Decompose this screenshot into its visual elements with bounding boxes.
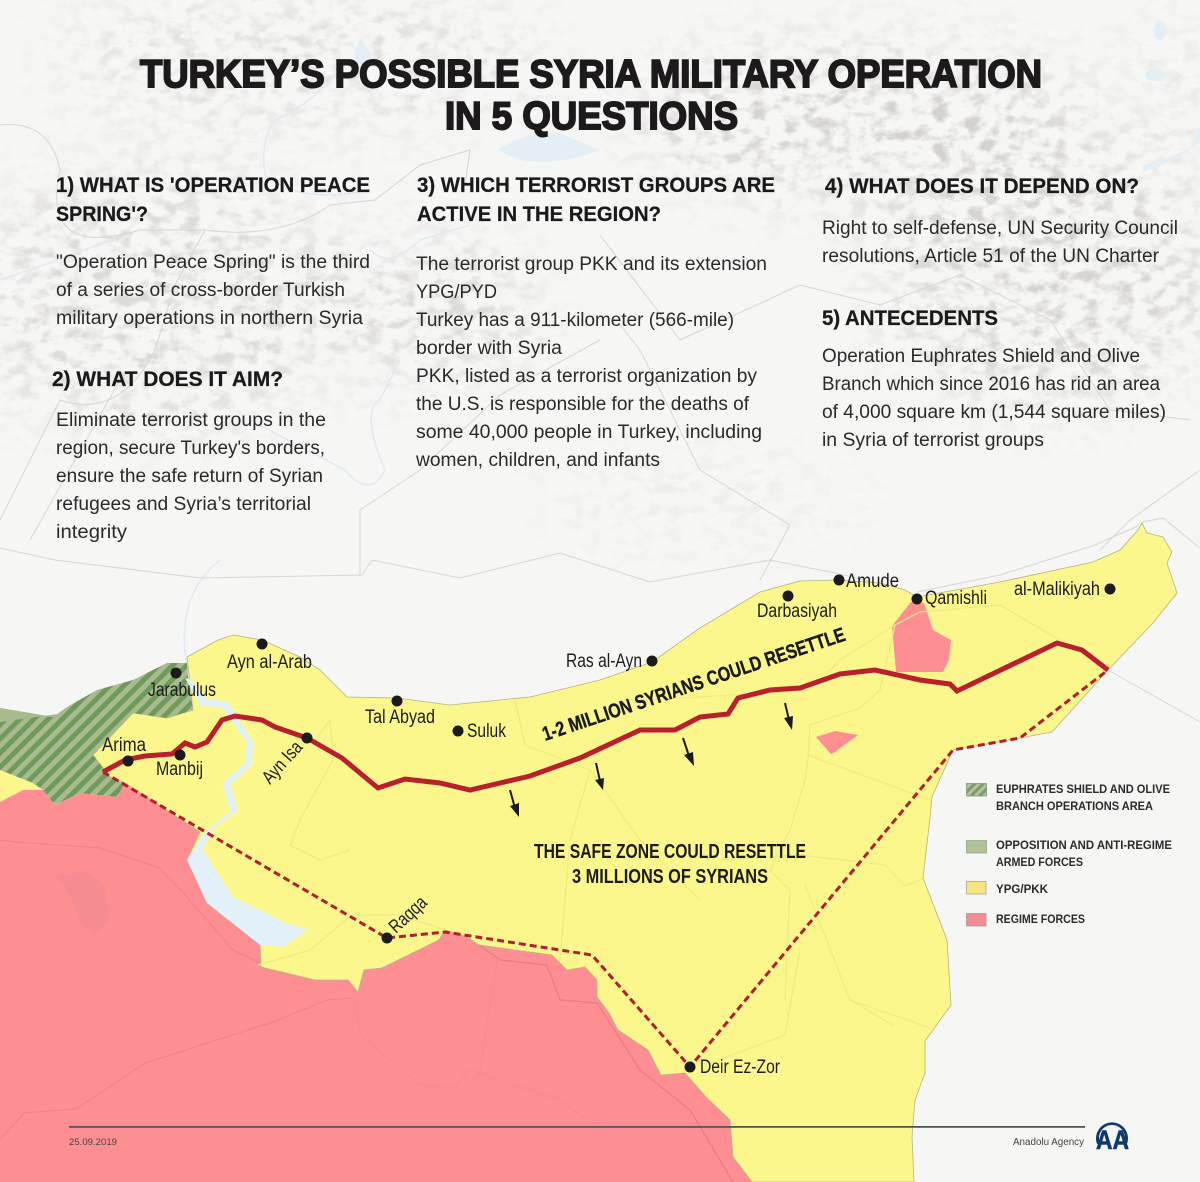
question 2 (52, 368, 326, 543)
footer rule (69, 1126, 1085, 1128)
question 4: Right to self-defense, UN Security Council (822, 218, 1178, 239)
area: regime pockets (892, 602, 951, 672)
safe zone dashed boundary (103, 670, 1108, 1067)
question 5: 5) ANTECEDENTS (822, 307, 998, 330)
question 3: 3) WHICH TERRORIST GROUPS ARE (417, 174, 775, 197)
city labels: Qamishli (925, 588, 987, 609)
question 1: SPRING'? (56, 203, 148, 226)
area: YPG/PKK main (93, 523, 1177, 1182)
question 4: resolutions, Article 51 of the UN Charter (822, 246, 1160, 267)
city labels: Darbasiyah (757, 601, 837, 622)
map: controlled areas (0, 523, 1177, 1182)
area: Euphrates Shield and Olive Branch (0, 663, 193, 805)
safe zone solid northern line (103, 643, 1108, 790)
question 5: Branch which since 2016 has rid an area (822, 374, 1160, 395)
question 2: refugees and Syria’s territorial (56, 494, 311, 515)
arrow 4 (784, 703, 793, 730)
city labels: Raqqa (385, 892, 432, 938)
background terrain map (0, 0, 1200, 722)
question 5: of 4,000 square km (1,544 square miles) (822, 402, 1166, 423)
question 5: in Syria of terrorist groups (822, 430, 1044, 451)
legend: regime forces: REGIME FORCES (996, 912, 1085, 926)
question 2: ensure the safe return of Syrian (56, 466, 323, 487)
legend (966, 782, 1172, 926)
icon: Anadolu Agency logo: AA (1096, 1125, 1129, 1155)
area: regime roads (0, 840, 733, 1182)
arrow 3 (683, 738, 694, 766)
question 1: of a series of cross-border Turkish (56, 280, 345, 301)
area: YPG/PKK western pocket (0, 770, 43, 802)
legend: YPG/PKK: YPG/PKK (996, 882, 1048, 896)
title (140, 53, 1042, 138)
legend: opposition (966, 838, 1172, 869)
agency name: Anadolu Agency (1013, 1137, 1084, 1148)
question 5 (822, 307, 1166, 451)
city labels: Tal Abyad (365, 707, 435, 728)
legend: opposition: ARMED FORCES (996, 855, 1083, 869)
city labels: Ayn Isa (258, 737, 307, 788)
question 2: region, secure Turkey's borders, (56, 438, 325, 459)
map annotation: safe zone (534, 841, 806, 888)
question 1 (56, 174, 370, 329)
question 1: military operations in northern Syria (56, 308, 363, 329)
legend: regime forces (966, 912, 1085, 926)
city labels: Manbij (156, 759, 203, 780)
legend: Euphrates Shield and Olive Branch (966, 782, 1170, 813)
question 3: Turkey has a 911-kilometer (566-mile) (416, 310, 734, 331)
map annotation: 1-2 million: 1-2 MILLION SYRIANS COULD RESETTLE (540, 624, 848, 746)
area: opposition forces (0, 708, 58, 722)
question 2: integrity (56, 522, 128, 543)
area: Euphrates river and lake (185, 678, 308, 947)
city labels: al-Malikiyah (1014, 579, 1100, 600)
question 3: PKK, listed as a terrorist organization by (416, 366, 758, 387)
question 2: 2) WHAT DOES IT AIM? (52, 368, 283, 391)
title: TURKEY’S POSSIBLE SYRIA MILITARY OPERATION (140, 53, 1042, 96)
title: IN 5 QUESTIONS (445, 95, 738, 138)
question 3: YPG/PYD (416, 282, 497, 303)
city labels: Ayn al-Arab (227, 652, 312, 673)
question 4 (822, 175, 1178, 267)
question 3: The terrorist group PKK and its extension (416, 254, 767, 275)
arrow 1 (510, 790, 519, 817)
city labels: Amude (846, 571, 899, 592)
legend: Euphrates Shield and Olive Branch: BRANCH OPERATIONS AREA (996, 799, 1153, 813)
legend: YPG/PKK (966, 882, 1048, 896)
question 3: border with Syria (416, 338, 562, 359)
legend: opposition: OPPOSITION AND ANTI-REGIME (996, 838, 1172, 852)
question 1: "Operation Peace Spring" is the third (56, 252, 370, 273)
city labels: Arima (102, 735, 146, 756)
map annotation: safe zone: THE SAFE ZONE COULD RESETTLE (534, 841, 806, 863)
question 3: some 40,000 people in Turkey, including (416, 422, 762, 443)
city labels (102, 571, 1100, 1078)
question 2: Eliminate terrorist groups in the (56, 410, 326, 431)
city labels: Ras al-Ayn (566, 651, 642, 672)
area: regime forces (0, 783, 752, 1182)
question 1: 1) WHAT IS 'OPERATION PEACE (56, 174, 370, 197)
question 5: Operation Euphrates Shield and Olive (822, 346, 1140, 367)
question 3: the U.S. is responsible for the deaths of (416, 394, 750, 415)
question 3 (415, 174, 775, 471)
question 4: 4) WHAT DOES IT DEPEND ON? (825, 175, 1139, 198)
map annotation: safe zone: 3 MILLIONS OF SYRIANS (572, 866, 768, 888)
arrow 2 (595, 763, 604, 790)
city labels: Suluk (467, 721, 506, 742)
question 3: women, children, and infants (415, 450, 660, 471)
area: yellow roads (258, 605, 1060, 1065)
area: regime terrain patch (55, 872, 110, 935)
city labels: Jarabulus (148, 680, 216, 701)
date: 25.09.2019 (69, 1137, 117, 1148)
city labels: Deir Ez-Zor (700, 1057, 781, 1078)
legend: Euphrates Shield and Olive Branch: EUPHRATES SHIELD AND OLIVE (996, 782, 1170, 796)
question 3: ACTIVE IN THE REGION? (417, 203, 661, 226)
arrows: resettlement direction (510, 703, 793, 817)
city markers (122, 574, 1116, 1072)
